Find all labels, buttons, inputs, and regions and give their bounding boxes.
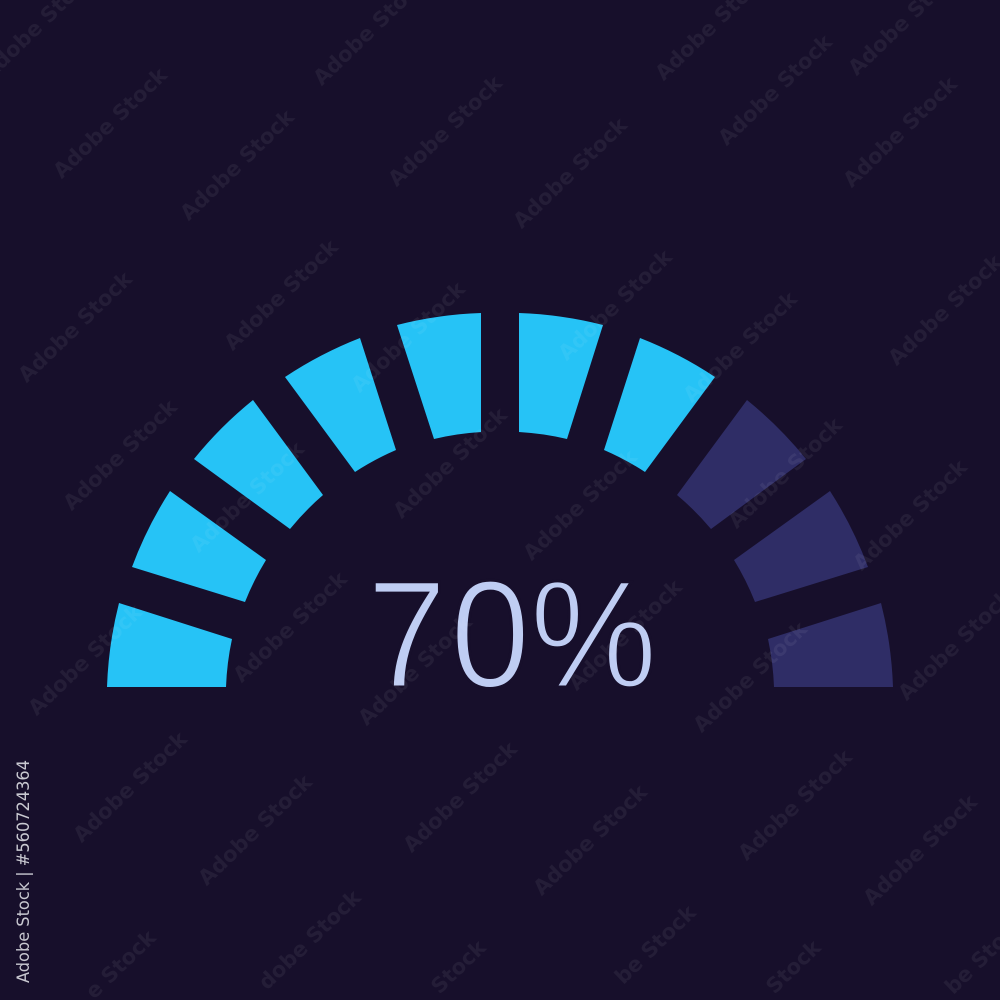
stock watermark pattern: dobe Stock xyxy=(254,885,366,994)
stock watermark pattern: Stock xyxy=(761,935,826,998)
stock watermark pattern: Adobe Stock xyxy=(346,276,471,397)
stock watermark pattern: Adobe Stock xyxy=(723,412,848,533)
stock watermark pattern: Adobe Stock xyxy=(848,454,973,575)
stock watermark pattern: Adobe Stock xyxy=(678,286,803,407)
empty segment 8 xyxy=(677,400,806,529)
stock watermark pattern: Adobe Stock xyxy=(553,244,678,365)
empty segment 9 xyxy=(734,491,868,602)
stock watermark pattern: Adobe Stock xyxy=(23,599,148,720)
filled segment 5 xyxy=(397,313,481,439)
stock watermark pattern: Adobe Stock xyxy=(563,574,688,695)
stock watermark pattern: Adobe Stock xyxy=(398,736,523,857)
filled segment 1 xyxy=(107,603,232,687)
percentage value: 70% xyxy=(367,550,657,720)
stock watermark pattern: Adobe Stock xyxy=(733,744,858,865)
stock watermark pattern: Adobe Stock xyxy=(518,444,643,565)
stock watermark pattern: Adobe Stock xyxy=(713,29,838,150)
filled segment 7 xyxy=(604,338,715,472)
stock watermark pattern: Adobe Stock xyxy=(175,104,300,225)
stock watermark pattern: Adobe Stock xyxy=(388,402,513,523)
semicircular gauge chart xyxy=(107,313,893,687)
stock watermark pattern: Adobe Stock xyxy=(13,266,138,387)
filled segment 4 xyxy=(285,338,396,472)
filled segment 3 xyxy=(194,400,323,529)
stock watermark pattern: Adobe Stock xyxy=(353,609,478,730)
stock watermark pattern: be Stock xyxy=(610,900,701,989)
stock watermark pattern: Adobe Stock xyxy=(528,779,653,900)
stock watermark pattern: Adobe Stock xyxy=(193,769,318,890)
stock watermark pattern: Adobe Stock xyxy=(383,70,508,191)
vertical stock ID label: Adobe Stock | #560724364 xyxy=(14,760,34,983)
stock watermark pattern: Adobe Stock xyxy=(508,112,633,233)
filled segment 2 xyxy=(132,491,266,602)
stock watermark pattern: Adobe Stock xyxy=(68,726,193,847)
stock watermark pattern: Adobe Stock xyxy=(688,616,813,737)
stock watermark pattern: Adobe Stock xyxy=(228,566,353,687)
stock watermark pattern: Adobe Stock xyxy=(48,62,173,183)
stock watermark pattern: Adobe Stock xyxy=(858,789,983,910)
stock watermark pattern: Adobe Stock xyxy=(838,71,963,192)
stock watermark pattern: Stock xyxy=(426,935,491,998)
filled segment 6 xyxy=(519,313,603,439)
stock watermark pattern: Adobe Stock xyxy=(58,394,183,515)
empty segment 10 xyxy=(768,603,893,687)
stock watermark pattern: Adobe Stock xyxy=(219,234,344,355)
stock watermark pattern: Adobe Stock xyxy=(185,436,310,557)
